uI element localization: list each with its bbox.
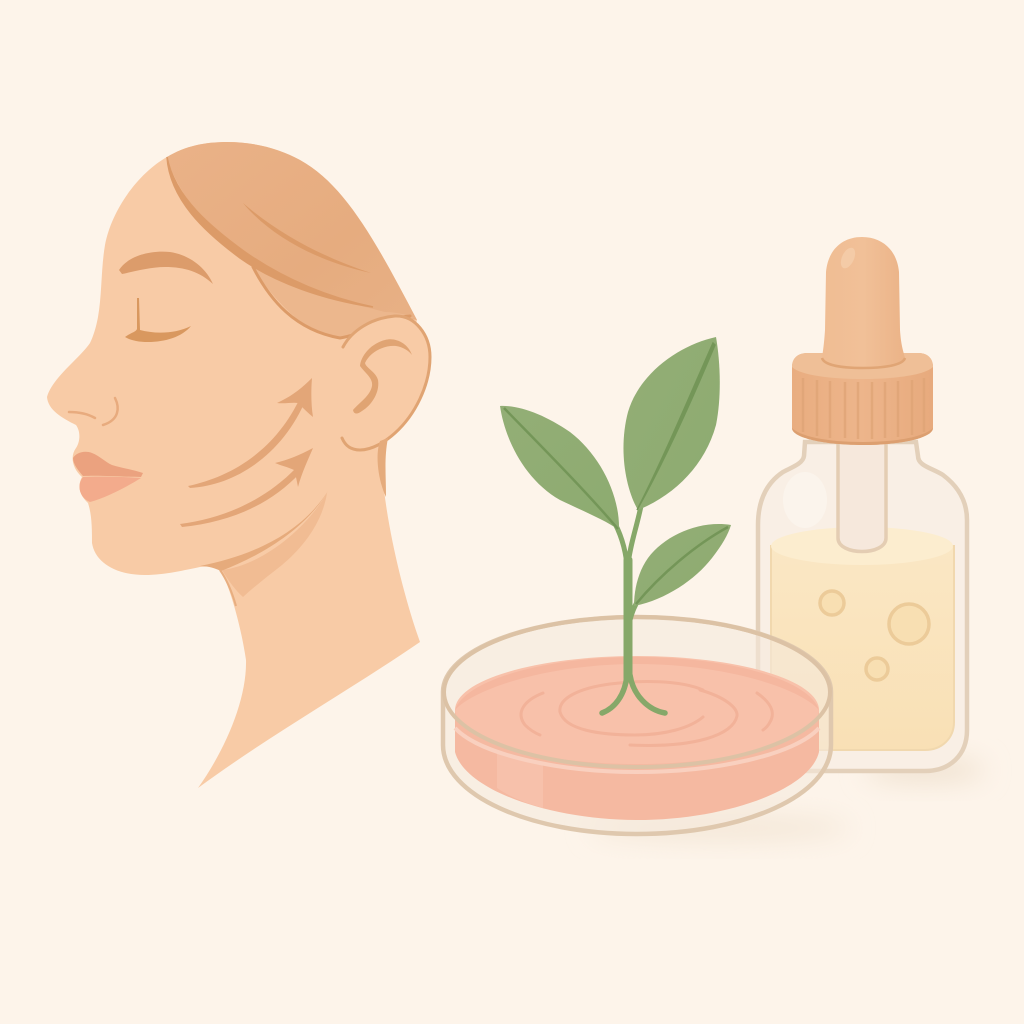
bubble small left bbox=[820, 591, 844, 615]
collar bottom lip bbox=[792, 428, 933, 445]
gel side bbox=[455, 710, 819, 820]
neck and head skin bbox=[47, 142, 420, 788]
glass body bbox=[758, 442, 967, 771]
bulb highlight bbox=[838, 245, 858, 271]
glass highlight bbox=[783, 472, 827, 528]
serum dropper bottle bbox=[758, 237, 985, 782]
oil surface bbox=[771, 527, 953, 565]
lips bbox=[73, 452, 143, 477]
collar ribs bbox=[803, 378, 924, 439]
woman's face profile bbox=[47, 142, 430, 788]
leaf top right bbox=[623, 337, 720, 510]
ear bbox=[337, 316, 430, 450]
arrow lower bbox=[180, 448, 313, 527]
root right bbox=[630, 675, 665, 713]
oil bbox=[771, 546, 954, 750]
bottle shadow bbox=[865, 758, 985, 782]
rubber bulb bbox=[822, 237, 905, 368]
petri dish bbox=[443, 617, 850, 840]
inner ear bbox=[353, 339, 412, 414]
jaw crease bbox=[200, 491, 328, 571]
nose nostril bbox=[69, 398, 118, 425]
left branch bbox=[612, 518, 627, 565]
neck front line bbox=[220, 570, 236, 606]
neck back shade bbox=[378, 438, 388, 497]
bubbles bbox=[820, 591, 929, 680]
gel side highlight bbox=[497, 752, 543, 808]
trunk bbox=[624, 560, 632, 678]
dish shadow bbox=[590, 816, 850, 840]
gel top bbox=[455, 656, 819, 764]
gel top rim shade bbox=[455, 657, 819, 710]
leaf left bbox=[500, 406, 619, 530]
root left bbox=[602, 675, 627, 713]
rim top ellipse bbox=[444, 617, 830, 767]
bubble large bbox=[889, 604, 929, 644]
wooden collar bbox=[792, 353, 933, 445]
leaf right small vein bbox=[636, 527, 728, 604]
eyebrow bbox=[119, 252, 213, 284]
stem bbox=[602, 506, 665, 713]
arrow upper bbox=[188, 378, 313, 488]
right leaf stem bbox=[630, 602, 637, 620]
gel ripples bbox=[521, 682, 772, 745]
closed eye bbox=[125, 298, 191, 342]
rim front bright band bbox=[455, 728, 819, 772]
glass outer bbox=[443, 617, 831, 834]
hair parting line bbox=[167, 157, 373, 307]
leaf left vein bbox=[504, 408, 618, 529]
hair bbox=[167, 142, 417, 338]
neck shadow under jaw bbox=[222, 493, 327, 597]
leaf right small bbox=[634, 524, 731, 606]
collar top surface bbox=[792, 353, 933, 379]
leaf top right vein bbox=[637, 343, 715, 510]
hair lower edge bbox=[253, 267, 410, 338]
bulb base line bbox=[822, 358, 905, 368]
hair lower lobe bbox=[252, 266, 415, 338]
dropper tube bbox=[838, 440, 886, 552]
bubble small bottom bbox=[866, 658, 888, 680]
ear outline bbox=[342, 316, 430, 450]
hair strand upper bbox=[243, 203, 371, 273]
top branch bbox=[628, 506, 641, 565]
seedling bbox=[500, 337, 731, 713]
